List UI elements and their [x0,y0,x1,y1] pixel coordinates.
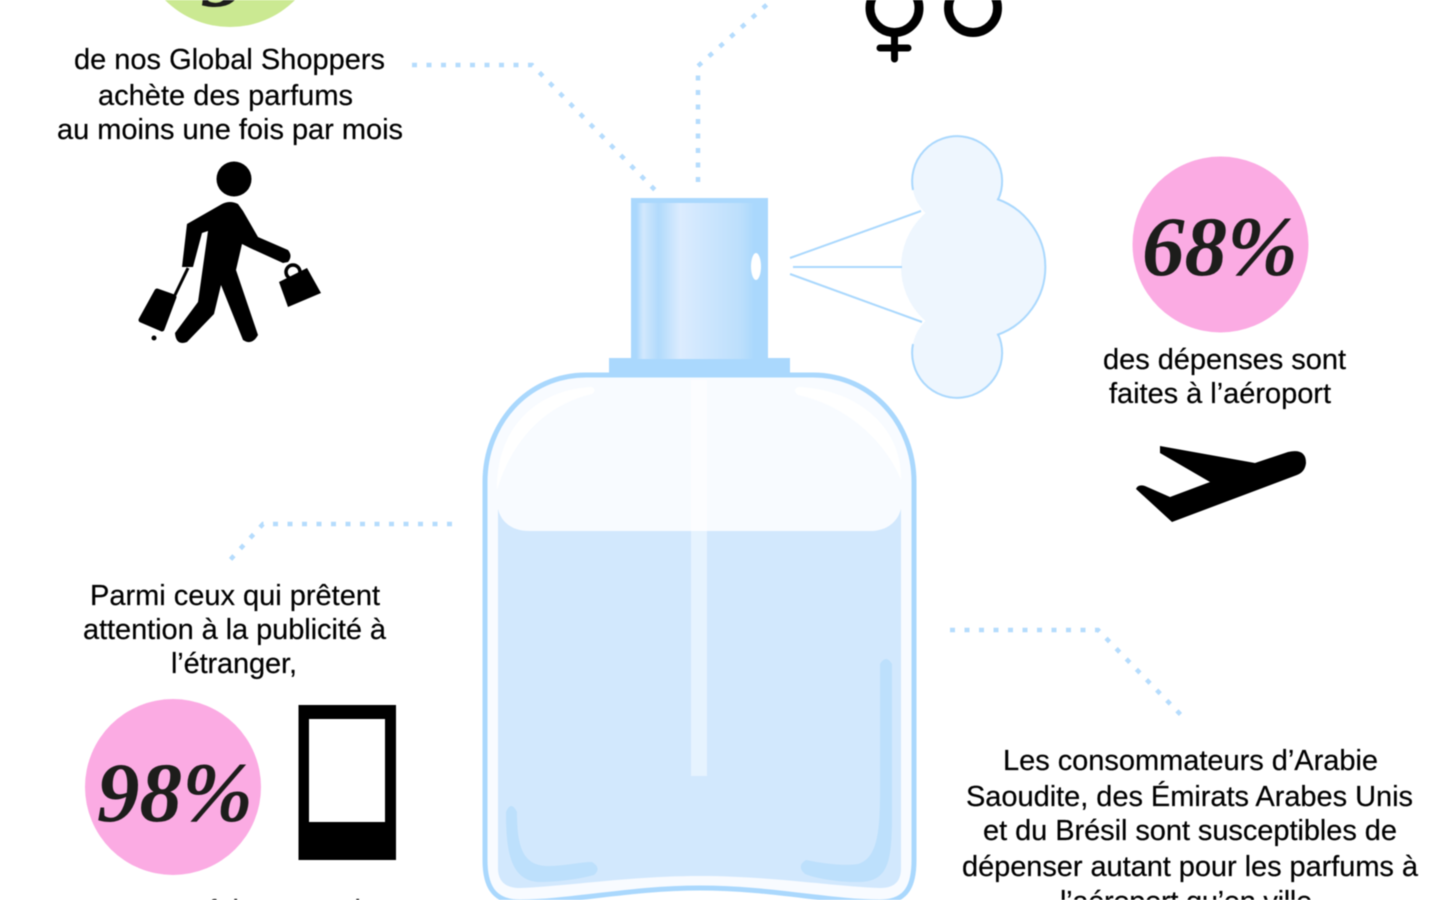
icon: airplane [1136,446,1306,522]
text: airport spending: des dépenses sont [1103,344,1346,376]
text: Global Shoppers: de nos Global Shoppers [74,44,385,76]
text: advertising abroad: attention à la publicité à [83,614,387,646]
upper glass shoulder [497,385,902,531]
text: consumers: Les consommateurs d’Arabie [1003,745,1378,777]
text: advertising abroad [83,580,387,680]
connector: lower right [950,630,1182,716]
illustration: perfume bottle [485,198,914,900]
text: advertising abroad: Parmi ceux qui prêtent [90,580,380,612]
text: consumers: et du Brésil sont susceptibles de [983,815,1397,847]
text: consumers: Saoudite, des Émirats Arabes Unis [966,780,1413,813]
illustration: spray cloud [790,136,1045,398]
stat circle: 98% [85,699,261,875]
glass highlights [497,387,594,490]
text: airport spending [1103,344,1346,410]
text: Global Shoppers: au moins une fois par mois [57,114,403,146]
bottle collar [609,358,790,374]
icon: traveller with luggage and bag [141,162,321,343]
text: airport spending: faites à l’aéroport [1109,378,1331,410]
liquid shading [506,659,892,882]
icon: phone [298,705,396,860]
stat circle: green [138,0,322,27]
text: consumers [962,745,1419,900]
liquid [498,490,901,888]
text: Global Shoppers: achète des parfums [98,80,353,112]
connector: top left to bottle [412,65,655,190]
bottle cap [631,198,768,359]
cloud outline [912,136,1045,398]
bottle glass [485,375,914,900]
text: consumers: dépenser autant pour les parfums à [962,851,1419,883]
spray lines [790,211,922,322]
dip tube [691,380,707,776]
stat circle: 68% [1132,156,1308,332]
text: Global Shoppers [57,44,403,146]
connector: lower left [230,524,452,560]
stat circle: 68%: 68% [1142,200,1298,294]
stat circle: 98%: 98% [97,746,253,840]
text: advertising abroad: l’étranger, [171,648,297,680]
icon: gender symbols [870,0,998,59]
connector: top to bottle cap [698,0,772,182]
